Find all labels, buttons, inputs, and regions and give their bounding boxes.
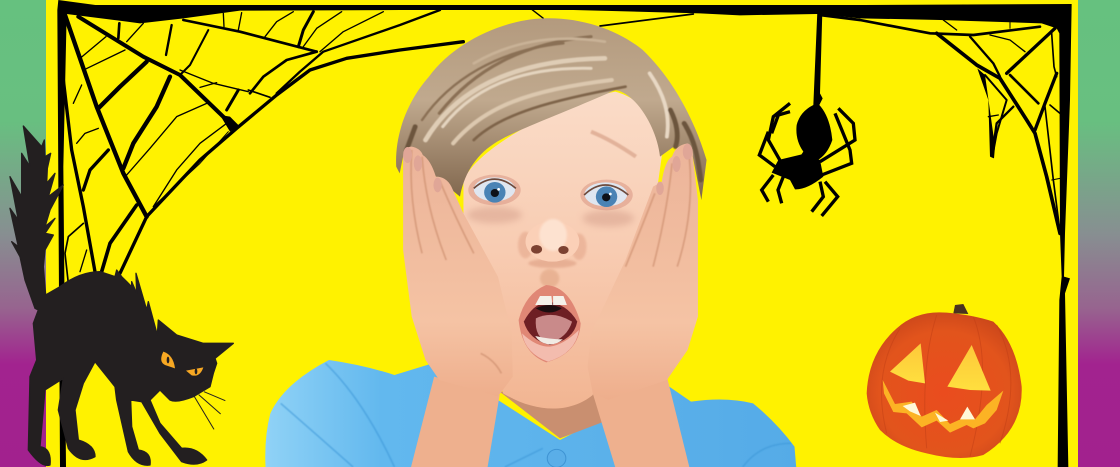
nose [518, 219, 587, 268]
left gradient strip [0, 0, 46, 467]
right fingernails [656, 144, 692, 195]
cat pupils [167, 357, 197, 374]
pumpkin mouth [883, 380, 1003, 433]
cobweb: top-right frame corner [573, 4, 1072, 467]
top frame line [58, 5, 1070, 10]
left hand [403, 147, 513, 397]
right hand [588, 143, 698, 400]
cat eyes [161, 352, 203, 376]
spider hanging on thread [759, 12, 855, 216]
neck [500, 392, 608, 438]
pumpkin right eye [947, 345, 991, 391]
cat tail and body silhouette [10, 126, 233, 466]
right finger lines [626, 157, 691, 267]
shirt button [547, 449, 566, 467]
pumpkin stem [953, 304, 968, 314]
left finger lines [411, 150, 501, 373]
black cat [10, 126, 233, 466]
pumpkin mouth glow [903, 403, 975, 422]
right forearm [593, 377, 689, 467]
right eye [580, 180, 633, 210]
hair [396, 18, 707, 200]
face shadow under eyes [467, 207, 634, 227]
left forearm [411, 377, 500, 467]
pumpkin left eye [890, 343, 925, 383]
blue polo shirt [265, 360, 796, 467]
spider legs [759, 103, 855, 216]
face [463, 92, 662, 409]
cat whiskers [194, 392, 225, 429]
thread and abdomen [796, 12, 832, 161]
eyebrow [591, 132, 636, 157]
spider body [772, 154, 823, 189]
open mouth [519, 269, 581, 362]
left eye [468, 175, 521, 205]
shirt folds [281, 363, 791, 467]
right gradient strip [1078, 0, 1120, 467]
left fingernails [403, 147, 442, 192]
cobweb: top-left frame corner [57, 0, 543, 467]
boy with hands on cheeks [265, 18, 796, 467]
hair strands [407, 37, 701, 180]
jack-o-lantern pumpkin [867, 304, 1022, 458]
pumpkin body [867, 312, 1022, 458]
pumpkin ribs [881, 315, 1011, 457]
